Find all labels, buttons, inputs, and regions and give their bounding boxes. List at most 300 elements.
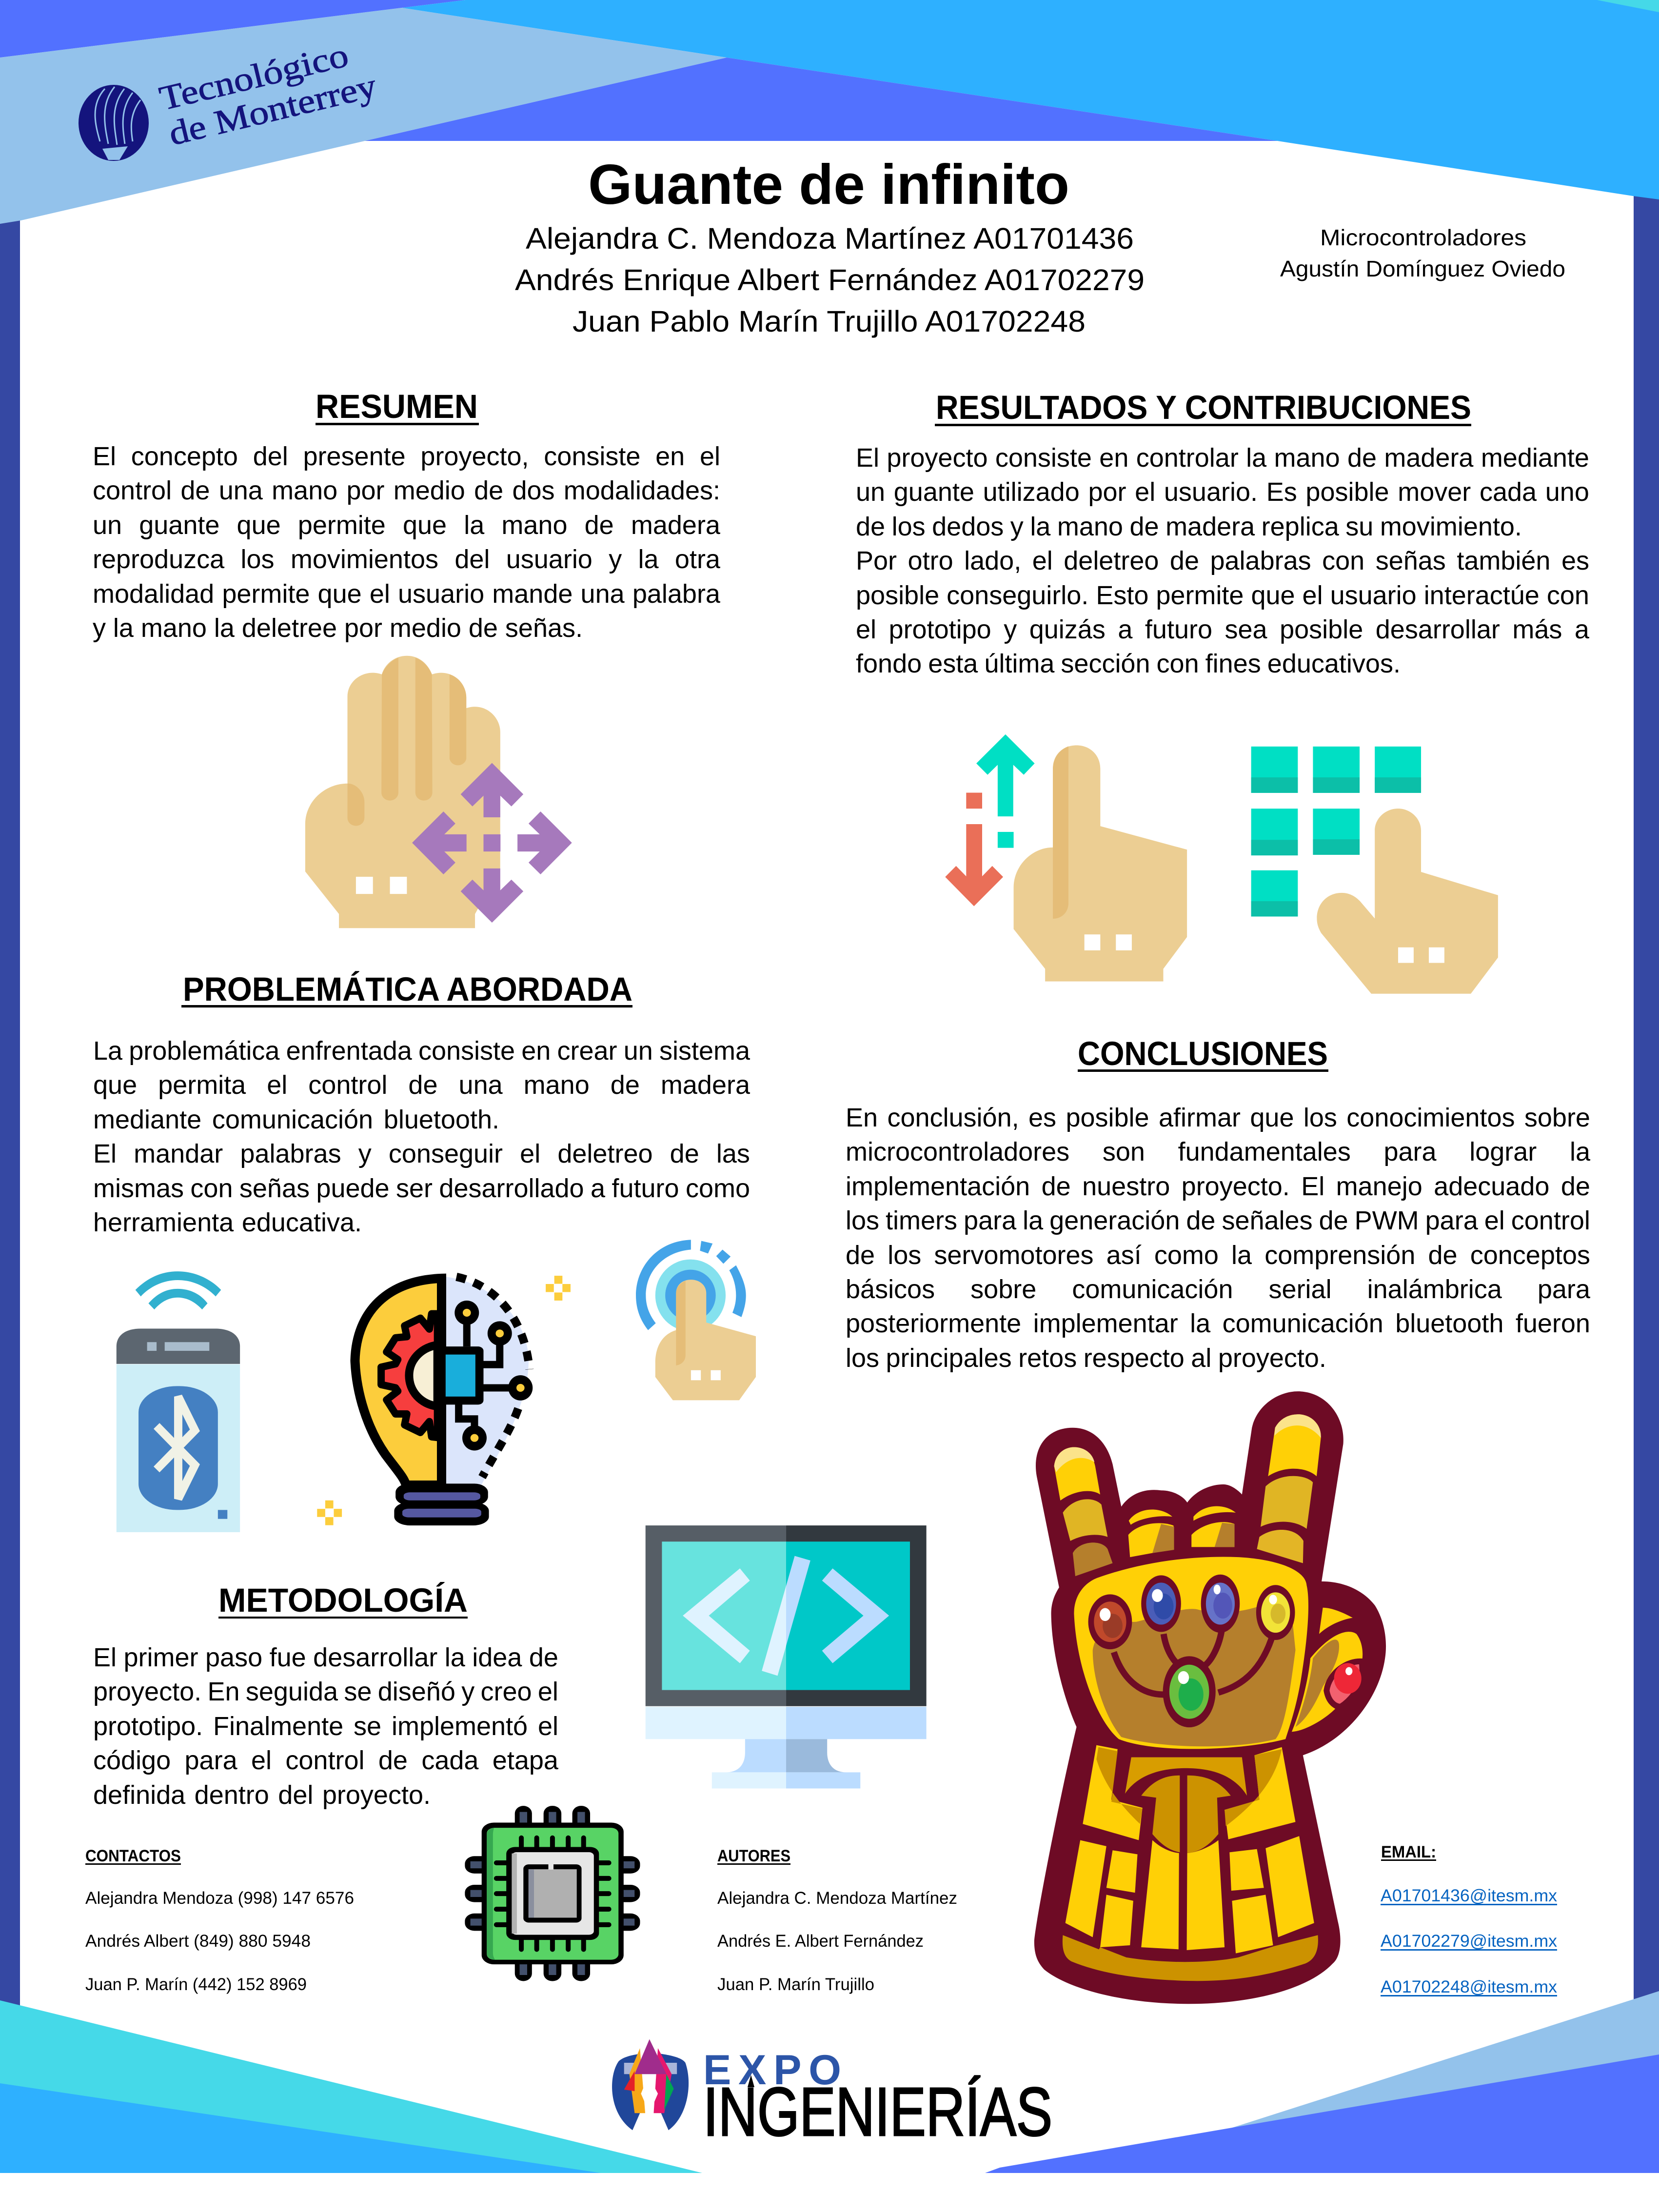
text block: metodología: definida xyxy=(93,1780,185,1810)
authors: Alejandra C. Mendoza Martínez A01701436 xyxy=(526,222,1134,255)
text block: resultados y contribuciones: usuario xyxy=(1330,581,1417,610)
text block: conclusiones: sobre xyxy=(970,1275,1036,1304)
title: Guante de infinito xyxy=(588,153,1069,216)
text block: resultados y contribuciones: su xyxy=(1345,512,1373,541)
text block: resultados y contribuciones: de xyxy=(1347,443,1377,473)
email list: A01701436@itesm.mx xyxy=(1381,1886,1557,1905)
heading: resultados y contribuciones: RESULTADOS Y CONTRIBUCIONES xyxy=(936,389,1471,426)
text block: problemática abordada: desarrollado xyxy=(439,1174,584,1203)
text block: problemática abordada: deletreo xyxy=(557,1139,653,1168)
heading: problemática abordada: PROBLEMÁTICA ABORDADA xyxy=(183,970,632,1008)
text block: resumen: de xyxy=(469,613,498,643)
text block: conclusiones: proyecto. xyxy=(1182,1172,1290,1201)
text block: conclusiones: posteriormente xyxy=(846,1309,1021,1338)
text block: resultados y contribuciones: mano xyxy=(1057,512,1123,541)
text block: resultados y contribuciones: educativos. xyxy=(1267,649,1401,678)
text block: problemática abordada: educativa. xyxy=(242,1208,362,1237)
text block: resultados y contribuciones: fines xyxy=(1205,649,1261,678)
text block: resumen: guante xyxy=(139,511,219,540)
text block: problemática abordada: que xyxy=(93,1070,137,1100)
text block: conclusiones: de xyxy=(1561,1172,1590,1201)
contact list: CONTACTOS xyxy=(85,1847,181,1865)
text block: resumen: dos xyxy=(512,476,555,505)
contact list: Alejandra Mendoza (998) 147 6576 xyxy=(85,1889,354,1908)
text block: resultados y contribuciones: movimiento. xyxy=(1380,512,1522,541)
text block: resumen: movimientos xyxy=(291,545,438,574)
text block: metodología: desarrollar xyxy=(313,1643,437,1672)
text block: resumen: modalidades: xyxy=(564,476,720,505)
text block: problemática abordada: a xyxy=(591,1174,605,1203)
logo: Tecnológico de Monterrey: de Monterrey xyxy=(165,67,380,153)
panel: bottom banner shapes xyxy=(0,1991,1659,2173)
text block: resultados y contribuciones: Es xyxy=(1266,477,1297,507)
text block: resultados y contribuciones: más xyxy=(1512,615,1562,644)
text block: resultados y contribuciones: mediante xyxy=(1481,443,1589,473)
icon: yellow sparkles xyxy=(317,1276,571,1525)
email list: EMAIL: xyxy=(1381,1843,1436,1861)
text block: conclusiones: comunicación xyxy=(1223,1309,1383,1338)
logo: Tecnológico de Monterrey xyxy=(79,36,380,161)
text block: resumen: un xyxy=(93,511,122,540)
text block: resultados y contribuciones: uno xyxy=(1545,477,1589,507)
text block: metodología xyxy=(93,1643,558,1810)
text block: problemática abordada: problemática xyxy=(129,1036,279,1066)
text block: conclusiones: retos xyxy=(1018,1343,1077,1373)
text block: resultados y contribuciones: quizás xyxy=(1029,615,1106,644)
text block: conclusiones xyxy=(846,1103,1591,1373)
text block: conclusiones: al xyxy=(1191,1343,1211,1373)
text block: problemática abordada: permita xyxy=(158,1070,246,1100)
text block: problemática abordada: de xyxy=(408,1070,438,1100)
text block: problemática abordada xyxy=(93,1036,750,1237)
icon: light bulb with gear and circuit xyxy=(355,1276,533,1525)
text block: resumen: permite xyxy=(222,579,310,609)
icon: finger touch xyxy=(636,1240,756,1400)
text block: conclusiones: comprensión xyxy=(1264,1241,1415,1270)
text block: resultados y contribuciones: otro xyxy=(908,546,953,575)
text block: conclusiones: En xyxy=(846,1103,878,1132)
text block: metodología: del xyxy=(278,1780,313,1810)
text block: resumen: por xyxy=(344,613,382,643)
text block: metodología: la xyxy=(445,1643,465,1672)
author list xyxy=(717,1847,957,1994)
heading: metodología: METODOLOGÍA xyxy=(218,1581,468,1619)
text block: resumen: usuario xyxy=(506,545,592,574)
text block: resumen: palabra xyxy=(632,579,720,609)
text block: conclusiones: lograr xyxy=(1469,1137,1537,1166)
text block: conclusiones: proyecto. xyxy=(1218,1343,1326,1373)
text block: problemática abordada: futuro xyxy=(612,1174,679,1203)
text block: resumen: que xyxy=(318,579,362,609)
text block: conclusiones: el xyxy=(1484,1206,1505,1235)
text block: problemática abordada: madera xyxy=(661,1070,750,1100)
text block: resultados y contribuciones: sea xyxy=(1225,615,1267,644)
icon: microchip xyxy=(465,1806,640,1981)
text block: resultados y contribuciones: replica xyxy=(1262,512,1339,541)
text block: problemática abordada: las xyxy=(716,1139,750,1168)
text block: conclusiones: los xyxy=(1304,1103,1337,1132)
text block: metodología: creo xyxy=(481,1677,532,1706)
text block: resultados y contribuciones: señas xyxy=(1376,546,1446,575)
text block: metodología: código xyxy=(93,1746,171,1775)
email list: A01702279@itesm.mx xyxy=(1381,1932,1557,1951)
text block: metodología: proyecto. xyxy=(322,1780,431,1810)
icon: hand with move arrows xyxy=(305,656,572,928)
course and professor: Agustín Domínguez Oviedo xyxy=(1280,256,1565,281)
authors: Andrés Enrique Albert Fernández A01702279 xyxy=(515,263,1145,296)
text block: resultados y contribuciones: futuro xyxy=(1145,615,1212,644)
text block: problemática abordada: mano xyxy=(524,1070,590,1100)
text block: resultados y contribuciones: a xyxy=(1118,615,1132,644)
text block: resumen: los xyxy=(241,545,275,574)
text block: resumen: presente xyxy=(303,442,406,471)
text block: problemática abordada: consiste xyxy=(418,1036,515,1066)
text block: conclusiones: la xyxy=(1231,1241,1252,1270)
text block: resultados y contribuciones: a xyxy=(1575,615,1589,644)
text block: resultados y contribuciones: y xyxy=(1004,615,1017,644)
text block: resultados y contribuciones: los xyxy=(892,512,926,541)
text block: metodología: implementó xyxy=(392,1712,528,1741)
text block: resumen xyxy=(93,442,720,643)
text block: resultados y contribuciones: el xyxy=(856,615,876,644)
text block: conclusiones: adecuado xyxy=(1434,1172,1549,1201)
text block: resumen: mano xyxy=(272,476,337,505)
text block: conclusiones: para xyxy=(1538,1275,1590,1304)
text block: conclusiones: comunicación xyxy=(1072,1275,1233,1304)
text block: conclusiones: afirmar xyxy=(1159,1103,1241,1132)
text block: problemática abordada: y xyxy=(358,1139,372,1168)
text block: resultados y contribuciones: desarrollar xyxy=(1376,615,1500,644)
text block: resultados y contribuciones: de xyxy=(856,512,885,541)
text block: conclusiones: para xyxy=(1425,1206,1478,1235)
text block: conclusiones: manejo xyxy=(1336,1172,1422,1201)
text block: resumen: que xyxy=(403,511,447,540)
text block: resumen: por xyxy=(346,476,384,505)
contact list xyxy=(85,1847,354,1994)
text block: resumen: la xyxy=(464,511,484,540)
text block: conclusiones: conceptos xyxy=(1470,1241,1590,1270)
text block: problemática abordada: el xyxy=(520,1139,540,1168)
text block: problemática abordada: mismas xyxy=(93,1174,184,1203)
text block: resultados y contribuciones: guante xyxy=(894,477,974,507)
text block: metodología: y xyxy=(461,1677,474,1706)
text block: conclusiones: para xyxy=(1383,1137,1437,1166)
text block: metodología: paso xyxy=(205,1643,262,1672)
text block: conclusiones: conocimientos xyxy=(1346,1103,1515,1132)
text block: conclusiones: bluetooth xyxy=(1395,1309,1503,1338)
text block: resumen: consiste xyxy=(544,442,640,471)
text block: resultados y contribuciones: El xyxy=(856,443,879,473)
text block: problemática abordada: ser xyxy=(396,1174,433,1203)
text block: conclusiones: de xyxy=(1319,1206,1348,1235)
text block: conclusiones: los xyxy=(846,1343,879,1373)
text block: metodología: fue xyxy=(270,1643,306,1672)
logo: Expo Ingenierías xyxy=(612,2039,1052,2150)
text block: metodología: idea xyxy=(472,1643,522,1672)
text block: resultados y contribuciones: con xyxy=(1157,649,1199,678)
text block: resultados y contribuciones: y xyxy=(1010,512,1024,541)
text block: conclusiones: sobre xyxy=(1524,1103,1590,1132)
text block: resumen: proyecto, xyxy=(420,442,529,471)
authors xyxy=(515,222,1145,338)
text block: problemática abordada: crear xyxy=(557,1036,617,1066)
text block: conclusiones: principales xyxy=(886,1343,1012,1373)
text block: resultados y contribuciones: posible xyxy=(1305,477,1389,507)
logo: Expo Ingenierías: INGENIERÍAS xyxy=(703,2073,1052,2150)
text block: problemática abordada: con xyxy=(190,1174,233,1203)
text block: metodología: Finalmente xyxy=(213,1712,343,1741)
text block: resultados y contribuciones: que xyxy=(1251,581,1295,610)
text block: resumen: de xyxy=(585,511,614,540)
text block: problemática abordada: señas xyxy=(239,1174,310,1203)
text block: resumen: el xyxy=(370,579,390,609)
text block: resumen: otra xyxy=(675,545,720,574)
text block: resultados y contribuciones: Esto xyxy=(1096,581,1148,610)
text block: conclusiones: de xyxy=(846,1241,875,1270)
text block: problemática abordada: La xyxy=(93,1036,122,1066)
text block: metodología: En xyxy=(207,1677,240,1706)
text block: conclusiones: posible xyxy=(1066,1103,1149,1132)
text block: conclusiones: serial xyxy=(1269,1275,1332,1304)
text block: resultados y contribuciones: con xyxy=(1322,546,1364,575)
text block: resultados y contribuciones: lado, xyxy=(964,546,1021,575)
text block: conclusiones: El xyxy=(1301,1172,1324,1201)
text block: resumen: y xyxy=(609,545,622,574)
text block: resultados y contribuciones: permite xyxy=(1156,581,1244,610)
logo: Expo Ingenierías: EXPO xyxy=(703,2047,841,2094)
text block: problemática abordada: el xyxy=(267,1070,287,1100)
text block: conclusiones: de xyxy=(1428,1241,1458,1270)
text block: resumen: madera xyxy=(631,511,720,540)
text block: resultados y contribuciones: interactúe xyxy=(1424,581,1540,610)
text block: metodología: cada xyxy=(421,1746,478,1775)
text block: problemática abordada: en xyxy=(521,1036,551,1066)
author list: AUTORES xyxy=(717,1847,790,1865)
text block: conclusiones: servomotores xyxy=(934,1241,1094,1270)
text block: resultados y contribuciones: mano xyxy=(1274,443,1340,473)
text block: metodología: dentro xyxy=(195,1780,269,1810)
text block: resultados y contribuciones: conseguirlo. xyxy=(947,581,1088,610)
text block: resumen: la xyxy=(214,613,235,643)
text block: resultados y contribuciones: madera xyxy=(1165,512,1255,541)
text block: metodología: etapa xyxy=(493,1746,558,1775)
text block: problemática abordada: sistema xyxy=(659,1036,750,1066)
text block: problemática abordada: de xyxy=(670,1139,699,1168)
text block: resultados y contribuciones: un xyxy=(856,477,885,507)
contact list: Juan P. Marín (442) 152 8969 xyxy=(85,1975,307,1994)
text block: resultados y contribuciones: también xyxy=(1457,546,1550,575)
text block: problemática abordada: conseguir xyxy=(389,1139,503,1168)
text block: resumen: de xyxy=(474,476,503,505)
text block: problemática abordada: mediante xyxy=(93,1105,201,1134)
text block: resultados y contribuciones: controlar xyxy=(1136,443,1239,473)
text block: resumen: en xyxy=(655,442,685,471)
text block: conclusiones: de xyxy=(1186,1206,1215,1235)
text block: conclusiones: la xyxy=(1190,1309,1210,1338)
text block: resultados y contribuciones: el xyxy=(1032,546,1053,575)
text block: resultados y contribuciones: proyecto xyxy=(887,443,988,473)
text block: conclusiones: la xyxy=(1570,1137,1590,1166)
text block: conclusiones: de xyxy=(1042,1172,1071,1201)
text block: resumen: El xyxy=(93,442,116,471)
heading: resumen: RESUMEN xyxy=(316,388,478,425)
text block: conclusiones: timers xyxy=(886,1206,957,1235)
text block: resumen: la xyxy=(113,613,134,643)
text block: resultados y contribuciones: utilizado xyxy=(983,477,1080,507)
text block: conclusiones: así xyxy=(1106,1241,1142,1270)
text block: resumen: reproduzca xyxy=(93,545,224,574)
text block: resumen: el xyxy=(700,442,720,471)
text block: resultados y contribuciones: fondo xyxy=(856,649,922,678)
authors: Juan Pablo Marín Trujillo A01702248 xyxy=(573,305,1086,338)
text block: metodología: proyecto. xyxy=(93,1677,201,1706)
text block: conclusiones: fueron xyxy=(1516,1309,1590,1338)
text block: resultados y contribuciones: deletreo xyxy=(1064,546,1159,575)
text block: resultados y contribuciones: última xyxy=(984,649,1054,678)
text block: metodología: prototipo. xyxy=(93,1712,203,1741)
text block: problemática abordada: una xyxy=(459,1070,503,1100)
text block: conclusiones: implementación xyxy=(846,1172,1030,1201)
text block: problemática abordada: de xyxy=(611,1070,640,1100)
text block: conclusiones: básicos xyxy=(846,1275,935,1304)
text block: conclusiones: respecto xyxy=(1084,1343,1185,1373)
text block: problemática abordada: comunicación xyxy=(212,1105,373,1134)
text block: problemática abordada: puede xyxy=(316,1174,390,1203)
author list: Andrés E. Albert Fernández xyxy=(717,1932,924,1951)
text block: conclusiones: inalámbrica xyxy=(1367,1275,1502,1304)
text block: resumen: medio xyxy=(394,476,465,505)
text block: resultados y contribuciones: posible xyxy=(1280,615,1363,644)
text block: problemática abordada: enfrentada xyxy=(286,1036,412,1066)
text block: metodología: de xyxy=(378,1746,408,1775)
text block: resultados y contribuciones: cada xyxy=(1480,477,1537,507)
text block: resultados y contribuciones: es xyxy=(1561,546,1589,575)
text block: resumen: deletree xyxy=(242,613,337,643)
text block: metodología: se xyxy=(344,1677,372,1706)
email list xyxy=(1381,1843,1557,1996)
text block: conclusiones: implementar xyxy=(1033,1309,1178,1338)
text block: conclusiones: fundamentales xyxy=(1178,1137,1351,1166)
text block: resumen: mano xyxy=(501,511,568,540)
text block: resultados y contribuciones: por xyxy=(1088,477,1126,507)
text block: resumen: medio xyxy=(390,613,461,643)
text block: conclusiones: los xyxy=(888,1241,921,1270)
text block: resumen: señas. xyxy=(505,613,583,643)
panel: top banner shapes xyxy=(0,0,1659,224)
text block: resumen: del xyxy=(253,442,288,471)
text block: resultados y contribuciones: consiste xyxy=(995,443,1092,473)
text block: metodología: el xyxy=(538,1712,558,1741)
text block: resultados y contribuciones: la xyxy=(1030,512,1050,541)
text block: conclusiones: para xyxy=(964,1206,1016,1235)
text block: resultados y contribuciones: palabras xyxy=(1210,546,1311,575)
text block: resumen: que xyxy=(237,511,281,540)
text block: resultados y contribuciones: posible xyxy=(856,581,939,610)
text block: conclusiones: control xyxy=(1511,1206,1590,1235)
text block: conclusiones: los xyxy=(846,1206,879,1235)
text block: resumen: modalidad xyxy=(93,579,214,609)
text block: resumen: la xyxy=(638,545,659,574)
text block: problemática abordada: El xyxy=(93,1139,117,1168)
text block: problemática abordada: palabras xyxy=(240,1139,341,1168)
course and professor xyxy=(1280,225,1565,281)
text block: conclusiones: como xyxy=(1154,1241,1219,1270)
text block: resultados y contribuciones xyxy=(856,443,1589,678)
text block: conclusiones: PWM xyxy=(1355,1206,1419,1235)
text block: resumen: una xyxy=(581,579,625,609)
text block: resultados y contribuciones: Por xyxy=(856,546,897,575)
text block: resumen: permite xyxy=(298,511,386,540)
text block: conclusiones: señales xyxy=(1222,1206,1313,1235)
text block: conclusiones: generación xyxy=(1049,1206,1180,1235)
text block: resultados y contribuciones: usuario. xyxy=(1164,477,1258,507)
heading: conclusiones: CONCLUSIONES xyxy=(1078,1035,1328,1072)
text block: resumen: del xyxy=(454,545,490,574)
text block: resultados y contribuciones: sección xyxy=(1061,649,1150,678)
text block: metodología: el xyxy=(251,1746,272,1775)
text block: resumen: concepto xyxy=(131,442,238,471)
text block: conclusiones: conclusión, xyxy=(887,1103,1019,1132)
text block: conclusiones: son xyxy=(1103,1137,1145,1166)
text block: problemática abordada: herramienta xyxy=(93,1208,234,1237)
text block: resumen: control xyxy=(93,476,172,505)
email list: A01702248@itesm.mx xyxy=(1381,1977,1557,1996)
course and professor: Microcontroladores xyxy=(1320,225,1526,250)
icon: monitor with code xyxy=(646,1525,927,1789)
text block: resultados y contribuciones: la xyxy=(1246,443,1266,473)
text block: metodología: El xyxy=(93,1643,117,1672)
text block: resultados y contribuciones: en xyxy=(1099,443,1128,473)
text block: conclusiones: microcontroladores xyxy=(846,1137,1069,1166)
text block: resultados y contribuciones: prototipo xyxy=(889,615,991,644)
text block: metodología: diseñó xyxy=(378,1677,455,1706)
text block: resumen: usuario xyxy=(398,579,484,609)
text block: resumen: mande xyxy=(492,579,573,609)
text block: metodología: de xyxy=(529,1643,558,1672)
text block: metodología: para xyxy=(185,1746,237,1775)
icon: infinity gauntlet xyxy=(1034,1391,1386,2004)
text block: resultados y contribuciones: mover xyxy=(1398,477,1471,507)
text block: resumen: una xyxy=(219,476,263,505)
text block: resumen: mano xyxy=(141,613,207,643)
text block: resultados y contribuciones: de xyxy=(1170,546,1199,575)
icon: phone with bluetooth xyxy=(117,1271,240,1532)
text block: resultados y contribuciones: dedos xyxy=(932,512,1004,541)
text block: problemática abordada: un xyxy=(624,1036,653,1066)
icon: finger on keypad xyxy=(1251,747,1498,994)
text block: problemática abordada: como xyxy=(686,1174,750,1203)
text block: problemática abordada: bluetooth. xyxy=(384,1105,499,1134)
text block: metodología: el xyxy=(538,1677,558,1706)
text block: resumen: de xyxy=(180,476,210,505)
text block: resultados y contribuciones: el xyxy=(1303,581,1323,610)
text block: conclusiones: es xyxy=(1028,1103,1056,1132)
text block: resumen: y xyxy=(93,613,106,643)
author list: Alejandra C. Mendoza Martínez xyxy=(717,1889,957,1908)
text block: conclusiones: la xyxy=(1023,1206,1043,1235)
text block: resultados y contribuciones: esta xyxy=(928,649,978,678)
author list: Juan P. Marín Trujillo xyxy=(717,1975,874,1994)
text block: resultados y contribuciones: madera xyxy=(1384,443,1473,473)
text block: problemática abordada: control xyxy=(308,1070,387,1100)
icon: finger up and down xyxy=(945,734,1187,981)
logo: Tecnológico de Monterrey: Tecnológico xyxy=(156,36,352,118)
text block: metodología: primer xyxy=(124,1643,198,1672)
text block: resultados y contribuciones: el xyxy=(1135,477,1155,507)
text block: problemática abordada: mandar xyxy=(134,1139,223,1168)
contact list: Andrés Albert (849) 880 5948 xyxy=(85,1932,311,1951)
text block: resultados y contribuciones: con xyxy=(1547,581,1589,610)
